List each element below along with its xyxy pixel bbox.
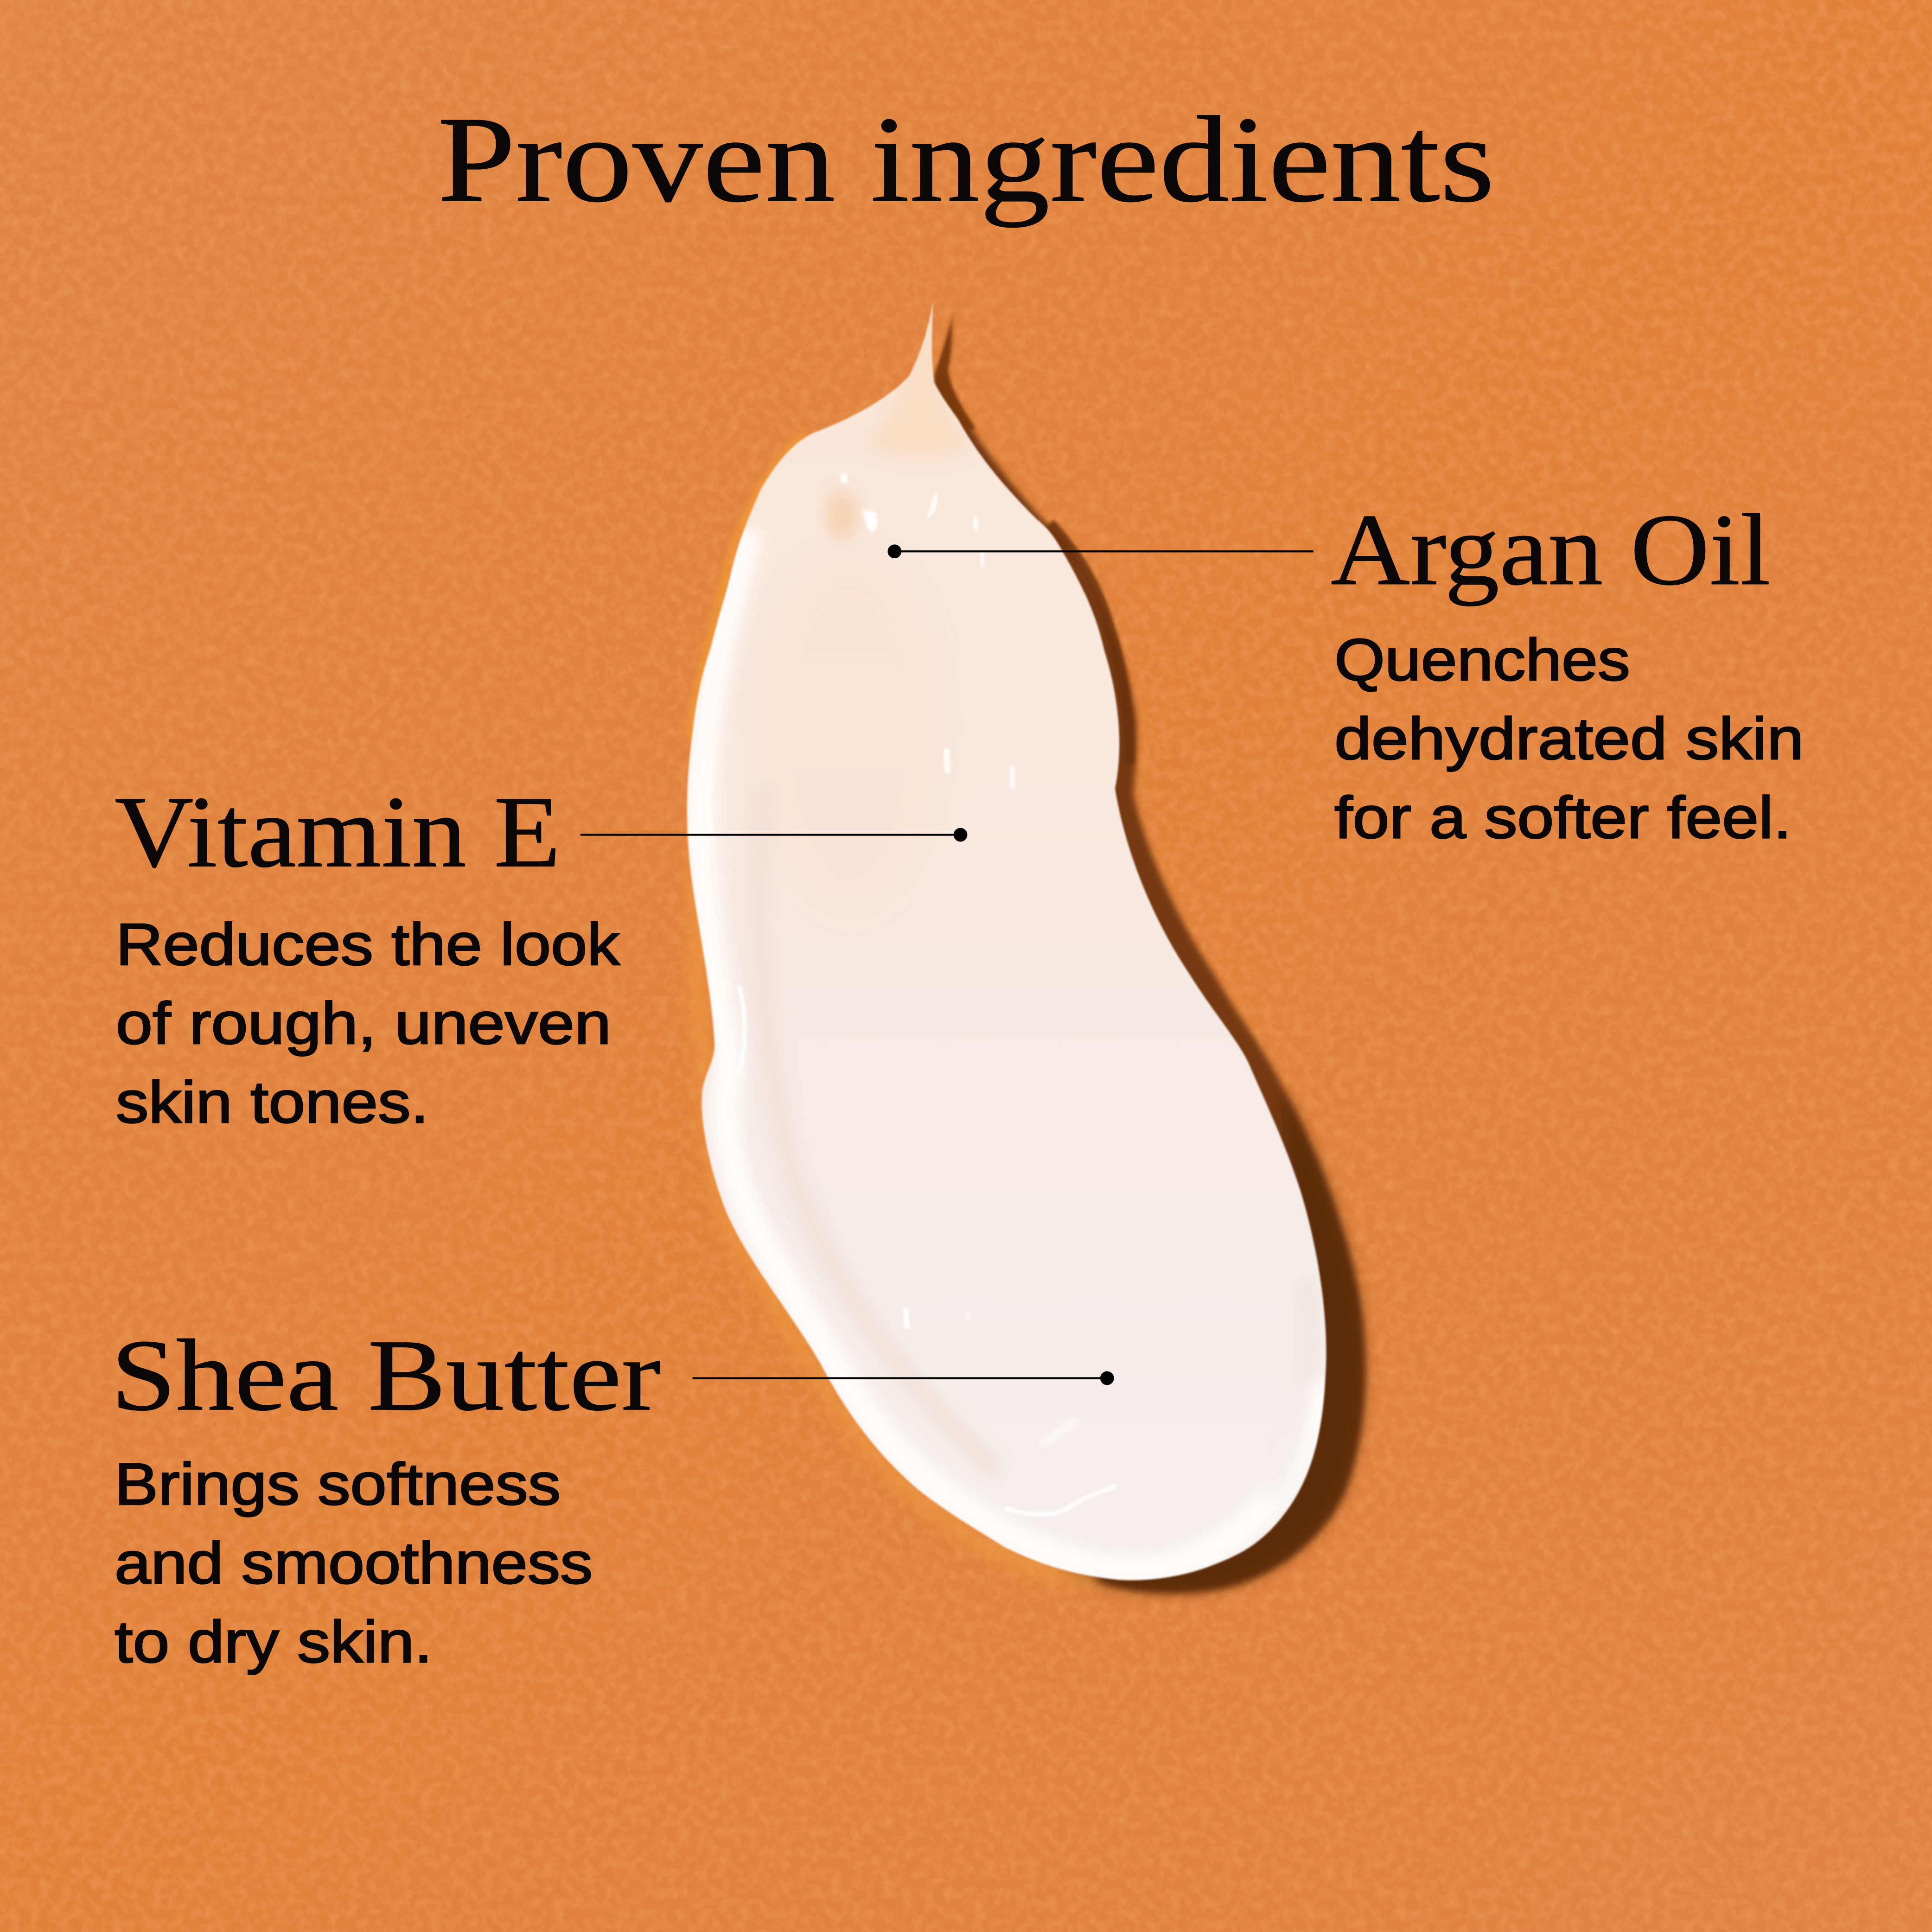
text: Shea Butter description: Brings softness: [115, 1452, 561, 1518]
text: Vitamin E description: skin tones.: [116, 1070, 429, 1135]
cast shadow: [690, 313, 1365, 1594]
heading: Vitamin E: Vitamin E: [115, 775, 561, 888]
leader line: Argan Oil: [887, 544, 1314, 558]
glossy highlights: [708, 473, 1116, 1514]
heading: Argan Oil: Argan Oil: [1331, 493, 1771, 606]
left rim light: [700, 530, 1319, 1571]
leader line: Vitamin E: [580, 828, 967, 842]
leader line: Shea Butter: [693, 1371, 1114, 1385]
text: Argan Oil description: Quenches: [1334, 627, 1630, 693]
right edge shade: [1269, 1282, 1308, 1497]
text: Vitamin E description: Reduces the look: [116, 912, 620, 978]
soft highlight: [1041, 1419, 1077, 1445]
callout: Shea Butter: [111, 1318, 1114, 1675]
heading: Shea Butter: Shea Butter: [111, 1318, 660, 1432]
callout: Vitamin E: [115, 775, 967, 1135]
inner fold shade: [759, 789, 998, 1473]
text: Shea Butter description: to dry skin.: [115, 1609, 433, 1675]
text: Vitamin E description: of rough, uneven: [116, 991, 611, 1057]
callout: Argan Oil: [887, 493, 1820, 851]
title: Proven ingredients: [437, 91, 1495, 228]
text: Argan Oil description: dehydrated skin: [1334, 706, 1804, 772]
text: Argan Oil description: for a softer feel.: [1334, 785, 1792, 851]
cream swatch with shadow: [665, 283, 1365, 1602]
peach inner shade: [752, 555, 949, 924]
text: Shea Butter description: and smoothness: [115, 1530, 593, 1596]
cream body: [665, 283, 1355, 1602]
